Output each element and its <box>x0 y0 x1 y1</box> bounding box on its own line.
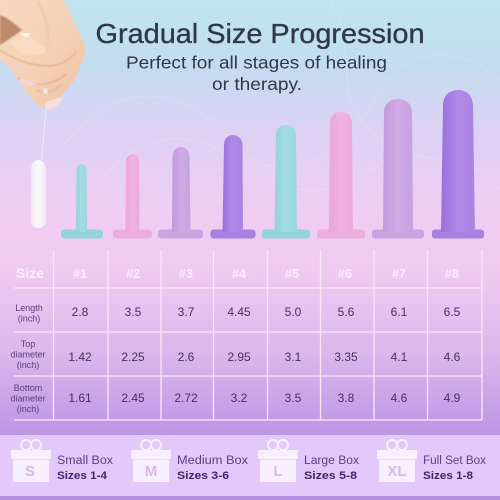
row: bottom diameter: 3.2 <box>231 391 248 405</box>
panel: box options <box>0 435 500 496</box>
row labels: diameter <box>10 350 46 360</box>
box small: Small Box <box>57 455 113 467</box>
table header row: #4 <box>232 267 246 281</box>
row: top diameter: 2.95 <box>227 350 251 364</box>
row: top diameter: 3.1 <box>285 350 302 364</box>
subtitle: Perfect for all stages of healing <box>126 52 387 72</box>
dilator 2 <box>113 154 152 238</box>
row: bottom diameter: 4.6 <box>391 391 408 405</box>
row: top diameter: 2.6 <box>178 350 195 364</box>
row: bottom diameter <box>68 391 461 405</box>
row: bottom diameter: 1.61 <box>68 391 92 405</box>
title: Gradual Size Progression <box>96 18 424 49</box>
dilator 5 <box>262 125 310 238</box>
table header row: #1 <box>73 267 87 281</box>
row labels: (inch) <box>17 404 39 414</box>
box medium: Sizes 3-6 <box>177 470 229 482</box>
row labels <box>10 303 46 414</box>
box small <box>11 440 113 482</box>
box extra large: XL <box>387 463 407 480</box>
box small: Sizes 1-4 <box>57 470 108 482</box>
row: top diameter: 4.6 <box>444 350 461 364</box>
dilator 1 <box>61 164 103 238</box>
row: length: 5.6 <box>338 305 355 319</box>
dilator 6 <box>317 112 365 238</box>
box small: S <box>25 463 35 480</box>
row: bottom diameter: 2.72 <box>174 391 198 405</box>
row labels: Top <box>21 339 35 349</box>
row: length: 6.5 <box>444 305 461 319</box>
table header row: Size <box>16 265 44 281</box>
row: bottom diameter: 3.5 <box>285 391 302 405</box>
row: length: 5.0 <box>285 305 302 319</box>
table header row: #6 <box>338 267 352 281</box>
icon: hand holding tampon string <box>0 0 85 110</box>
box large: L <box>273 463 283 480</box>
row: bottom diameter: 2.45 <box>121 391 145 405</box>
row: length <box>72 305 461 319</box>
table grid <box>14 250 482 420</box>
dilator 3 <box>158 147 203 238</box>
box large: Large Box <box>304 455 359 467</box>
table header row: #7 <box>392 267 406 281</box>
row: length: 2.8 <box>72 305 89 319</box>
row labels: (inch) <box>18 314 40 324</box>
row: top diameter: 2.25 <box>121 350 145 364</box>
row: top diameter: 4.1 <box>391 350 408 364</box>
table header row: #8 <box>445 267 459 281</box>
dilator 7 <box>372 99 424 238</box>
table: size chart <box>10 250 482 420</box>
box extra large: Sizes 1-8 <box>423 470 473 482</box>
dilator 4 <box>210 135 256 238</box>
row: top diameter <box>68 350 461 364</box>
table header row: #5 <box>285 267 299 281</box>
box extra large: Full Set Box <box>423 455 486 467</box>
box extra large <box>377 440 486 482</box>
subtitle <box>126 52 387 94</box>
subtitle: or therapy. <box>212 74 302 94</box>
box medium <box>131 440 248 482</box>
row labels: (inch) <box>17 360 39 370</box>
row labels: diameter <box>10 394 46 404</box>
row: length: 3.5 <box>125 305 142 319</box>
box large <box>258 440 359 482</box>
table header row: #2 <box>126 267 140 281</box>
box medium: M <box>145 463 157 480</box>
row: top diameter: 1.42 <box>68 350 92 364</box>
dilator 8 <box>432 90 484 238</box>
row labels: Length <box>15 303 43 313</box>
row: bottom diameter: 3.8 <box>338 391 355 405</box>
table header row: #3 <box>179 267 193 281</box>
row: top diameter: 3.35 <box>334 350 358 364</box>
row: length: 4.45 <box>227 305 251 319</box>
row: length: 3.7 <box>178 305 195 319</box>
box large: Sizes 5-8 <box>304 470 357 482</box>
box medium: Medium Box <box>177 455 248 467</box>
icon: tampon with string <box>31 110 46 228</box>
row labels: Bottom <box>14 383 42 393</box>
row: bottom diameter: 4.9 <box>444 391 461 405</box>
row: length: 6.1 <box>391 305 408 319</box>
table header row <box>16 265 459 281</box>
